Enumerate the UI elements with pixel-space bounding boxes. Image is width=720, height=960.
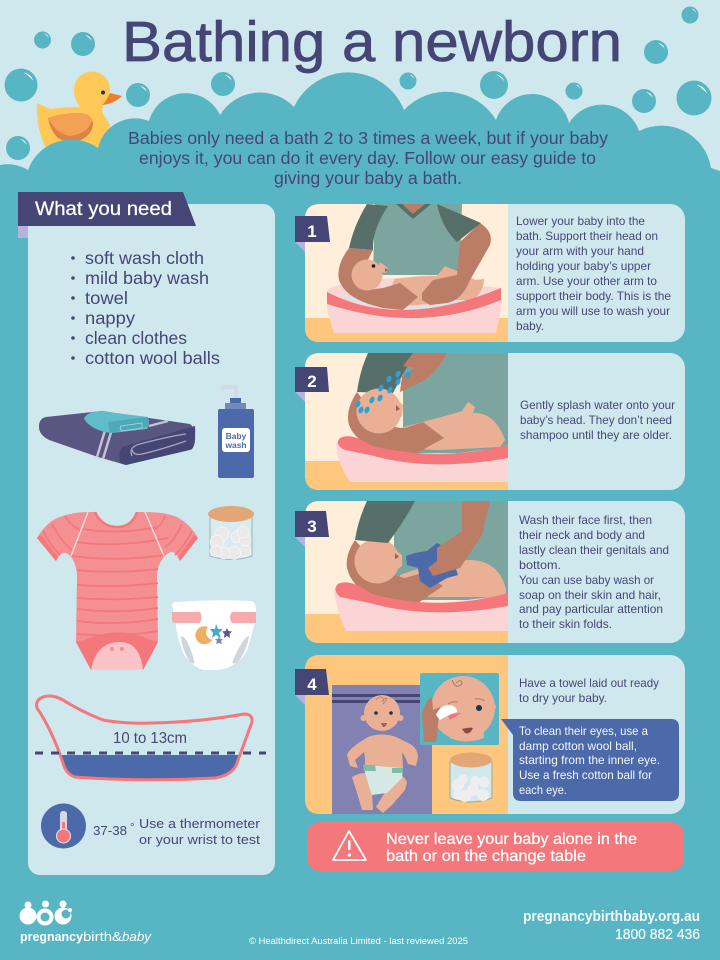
step 1 text: arm you will use to wash your: [516, 304, 670, 318]
step 3 card: [295, 501, 685, 643]
step 3 text: bottom.: [519, 558, 561, 572]
logo: pregnancy birth and baby: birth&: [83, 929, 122, 944]
step 4 text: [519, 676, 659, 705]
illustration: lowering baby into bath: [305, 204, 508, 342]
logo: pregnancy birth and baby: baby: [122, 929, 153, 944]
warning banner: Never leave your baby alone in the: [386, 831, 637, 848]
foam cloud: [0, 72, 720, 260]
thermometer temperature note: [41, 804, 261, 848]
inset: cleaning eye: [420, 673, 499, 745]
illustration: washing with cloth: [305, 501, 508, 643]
water depth label: 10 to 13cm: [113, 730, 187, 747]
step 4 text: to dry your baby.: [519, 691, 607, 705]
step 2 card: [295, 353, 685, 490]
step 3 text: soap on their skin and hair,: [519, 588, 661, 602]
callout: cleaning eyes: starting from the inner eye.: [519, 753, 660, 767]
step number 3: [295, 511, 329, 547]
callout: cleaning eyes: Use a fresh cotton ball for: [519, 768, 652, 782]
icon: rubber duck: [37, 72, 122, 150]
illustration: drying and eye cleaning: [305, 655, 508, 814]
icon: striped bodysuit: [37, 512, 198, 670]
callout: cleaning eyes: To clean their eyes, use a: [519, 724, 648, 738]
step 3 text: and pay particular attention: [519, 602, 663, 616]
thermometer temperature note: Use a thermometer: [139, 816, 261, 831]
intro text: [128, 128, 608, 188]
step 1 text: holding your baby’s upper: [516, 259, 651, 273]
heading: what you need: What you need: [35, 198, 172, 220]
thermometer temperature note: or your wrist to test: [139, 832, 260, 847]
step number 1: 1: [307, 222, 317, 241]
intro text: Babies only need a bath 2 to 3 times a week, but if your baby: [128, 128, 608, 148]
step 2 text: baby’s head. They don’t need: [520, 413, 672, 427]
icon: cotton wool jar: [208, 506, 254, 560]
contact details: [523, 909, 700, 943]
heading: what you need: [18, 192, 196, 238]
step 3 text: You can use baby wash or: [519, 573, 654, 587]
step number 4: 4: [307, 675, 317, 694]
step 1 card: [295, 204, 685, 342]
icon: baby wash bottle: Baby: [226, 431, 247, 441]
step 3 text: Wash their face first, then: [519, 513, 652, 527]
step 1 text: support their body. This is the: [516, 289, 671, 303]
intro text: giving your baby a bath.: [274, 168, 462, 188]
icon: warning triangle: [333, 831, 366, 860]
contact details: pregnancybirthbaby.org.au: [523, 909, 700, 925]
logo: pregnancy birth and baby: pregnancy: [20, 929, 84, 944]
icon: folded towel: [39, 411, 195, 465]
step number 1: [295, 216, 330, 252]
step 3 text: lastly clean their genitals and: [519, 543, 669, 557]
step 2 text: [520, 398, 675, 442]
panel: what you need: [18, 192, 275, 875]
checklist: cotton wool balls: [85, 348, 220, 368]
header sky background: [0, 0, 720, 180]
checklist: nappy: [85, 308, 135, 328]
thermometer temperature note: °: [130, 822, 134, 834]
thermometer temperature note: 37-38: [93, 823, 127, 838]
step 4 text: Have a towel laid out ready: [519, 676, 659, 690]
step number 3: 3: [307, 517, 317, 536]
step 3 text: to their skin folds.: [519, 617, 612, 631]
step 3 text: [519, 513, 669, 631]
intro text: enjoys it, you can do it every day. Follow our easy guide to: [139, 148, 596, 168]
step number 2: 2: [307, 372, 317, 391]
checklist: soft wash cloth: [85, 248, 204, 268]
step 1 text: your arm with your hand: [516, 244, 644, 258]
icon: nappy: [172, 600, 256, 670]
warning banner: bath or on the change table: [386, 848, 586, 865]
checklist: clean clothes: [85, 328, 187, 348]
warning banner: [307, 822, 684, 871]
step 3 text: their neck and body and: [519, 528, 645, 542]
step number 4: [295, 669, 329, 705]
baby on towel: [332, 685, 432, 814]
contact details: 1800 882 436: [615, 927, 700, 943]
step 1 text: [516, 214, 671, 333]
checklist: mild baby wash: [85, 268, 209, 288]
callout: cleaning eyes: each eye.: [519, 783, 567, 797]
step number 2: [295, 367, 329, 402]
step 1 text: Lower your baby into the: [516, 214, 645, 228]
step 1 text: arm. Use your other arm to: [516, 274, 657, 288]
step 2 text: shampoo until they are older.: [520, 428, 672, 442]
title: Bathing a newborn: [122, 10, 622, 73]
logo: pregnancy birth and baby: [20, 900, 153, 944]
bubbles: [4, 6, 711, 160]
callout: cleaning eyes: [501, 719, 679, 801]
step 4 card: [295, 655, 685, 814]
checklist: [71, 248, 220, 368]
icon: baby wash bottle: wash: [225, 440, 246, 450]
cotton wool jar: [450, 752, 492, 802]
step 1 text: baby.: [516, 319, 544, 333]
callout: cleaning eyes: damp cotton wool ball,: [519, 739, 637, 753]
bath water level diagram: [35, 696, 266, 780]
illustration: splashing water on head: [305, 353, 508, 490]
copyright: © Healthdirect Australia Limited - last reviewed 2025: [249, 936, 468, 946]
step 1 text: bath. Support their head on: [516, 229, 658, 243]
checklist: towel: [85, 288, 128, 308]
step 2 text: Gently splash water onto your: [520, 398, 675, 412]
icon: baby wash bottle: [218, 385, 254, 478]
